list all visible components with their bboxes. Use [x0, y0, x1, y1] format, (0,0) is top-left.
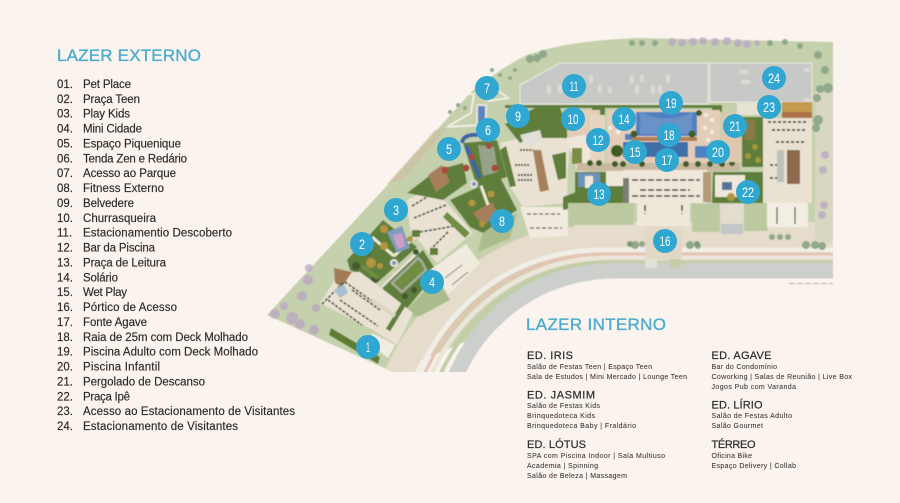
- block: ed. lírio: Salão Gourmet: [712, 423, 763, 430]
- item 18: 18.: [57, 332, 73, 344]
- marker 8: 8: [499, 213, 505, 229]
- item 17: 17.: [57, 317, 73, 329]
- item 20: Piscina Infantil: [83, 362, 160, 374]
- marker 24: [762, 66, 786, 90]
- marker 22: [736, 180, 760, 204]
- block: ed. jasmim: Brinquedoteca Kids: [527, 413, 596, 420]
- site plan map: [267, 37, 834, 372]
- marker 9: 9: [515, 108, 521, 124]
- marker 5: 5: [446, 141, 452, 157]
- reading garden: [568, 171, 768, 234]
- item 20: 20.: [57, 362, 73, 374]
- mini cidade garden: [382, 249, 450, 317]
- item 09: Belvedere: [83, 198, 134, 210]
- block: ed. lírio: Salão de Festas Adulto: [712, 413, 792, 420]
- marker 6: [476, 118, 500, 142]
- item 24: Estacionamento de Visitantes: [83, 421, 238, 433]
- item 07: Acesso ao Parque: [83, 168, 176, 180]
- block: ed. agave: Jogos Pub com Varanda: [712, 384, 796, 391]
- marker 22: 22: [742, 184, 754, 200]
- marker 15: [623, 140, 647, 164]
- marker 3: [384, 198, 408, 222]
- map markers: [350, 66, 786, 359]
- block: ed. iris: ED. IRIS: [527, 350, 573, 362]
- marker 15: 15: [630, 144, 641, 160]
- block: ed. agave: [712, 350, 852, 391]
- block: ed. lótus: Academia | Spinning: [527, 463, 598, 470]
- block: térreo: Oficina Bike: [712, 453, 752, 460]
- item 10: 10.: [57, 213, 73, 225]
- marker 10: 10: [568, 111, 579, 127]
- item 01: 01.: [57, 79, 73, 91]
- block: ed. lírio: [712, 398, 792, 430]
- item 22: 22.: [57, 391, 73, 403]
- marker 10: [561, 107, 585, 131]
- item 02: [57, 94, 140, 106]
- marker 2: 2: [359, 236, 365, 252]
- item 21: 21.: [57, 376, 73, 388]
- pet place: [329, 328, 395, 364]
- item 21: Pergolado de Descanso: [83, 376, 205, 388]
- central building: [615, 170, 711, 268]
- marker 23: 23: [763, 99, 775, 115]
- marker 4: 4: [429, 274, 435, 290]
- praça ipê: [712, 172, 763, 203]
- item 18: Raia de 25m com Deck Molhado: [83, 332, 248, 344]
- pool deck: [607, 110, 720, 163]
- cover the outside of the road curve: [497, 278, 833, 328]
- entrance portico trees: [627, 241, 700, 247]
- block: ed. iris: Salão de Festas Teen | Espaço Teen: [527, 364, 652, 371]
- item 17: Fonte Agave: [83, 317, 147, 329]
- vegetation and flowers: [270, 37, 833, 335]
- block: ed. agave: Coworking | Salas de Reunião | Live Box: [712, 374, 852, 381]
- heading: lazer interno: LAZER INTERNO: [526, 315, 666, 334]
- block: ed. iris: Sala de Estudos | Mini Mercado | Lounge Teen: [527, 374, 687, 381]
- marker 23: [757, 95, 781, 119]
- item 02: 02.: [57, 94, 73, 106]
- marker 7: 7: [484, 80, 490, 96]
- marker 9: [506, 104, 530, 128]
- marker 8: [490, 209, 514, 233]
- item 16: Pórtico de Acesso: [83, 302, 177, 314]
- item 11: Estacionamentio Descoberto: [83, 228, 232, 240]
- churrasqueira and bar: [565, 110, 605, 172]
- marker 20: 20: [712, 144, 724, 160]
- parking lots: [520, 63, 812, 104]
- block: ed. lírio: ED. LÍRIO: [712, 398, 763, 412]
- item 11: 11.: [57, 228, 72, 240]
- marker 13: 13: [594, 186, 605, 202]
- item 09: 09.: [57, 198, 73, 210]
- pools: [608, 110, 714, 158]
- marker 4: [420, 270, 444, 294]
- garden 5 and 6: [386, 127, 507, 200]
- right side strip: [815, 92, 833, 242]
- item 16: 16.: [57, 302, 73, 314]
- item 03: [57, 109, 130, 121]
- item 14: [57, 272, 118, 284]
- pergola garden: [722, 103, 767, 167]
- item 04: Mini Cidade: [83, 124, 142, 136]
- marker 17: 17: [662, 152, 673, 168]
- marker 14: [612, 107, 636, 131]
- item 03: Play Kids: [83, 109, 130, 121]
- heading: lazer externo: LAZER EXTERNO: [57, 46, 201, 65]
- marker 21: [723, 114, 747, 138]
- central left building: [499, 107, 576, 238]
- marker 17: [655, 148, 679, 172]
- item 09: [57, 198, 134, 210]
- item 03: 03.: [57, 109, 73, 121]
- marker 12: [586, 128, 610, 152]
- item 19: Piscina Adulto com Deck Molhado: [83, 347, 258, 359]
- item 15: [57, 287, 127, 299]
- item 04: [57, 124, 142, 136]
- item 05: 05.: [57, 138, 73, 150]
- item 08: Fitness Externo: [83, 183, 164, 195]
- marker 2: [350, 232, 374, 256]
- palm promenade: [576, 160, 740, 172]
- marker 13: [587, 182, 611, 206]
- item 15: Wet Play: [83, 287, 127, 299]
- building 2: [407, 187, 480, 294]
- block: ed. jasmim: Brinquedoteca Baby | Fraldário: [527, 423, 636, 430]
- list: lazer externo: [57, 79, 295, 433]
- block: térreo: Espaço Delivery | Collab: [712, 463, 796, 470]
- park access walkway: [447, 87, 508, 127]
- block: ed. lótus: SPA com Piscina Indoor | Sala Multiuso: [527, 453, 665, 460]
- block: ed. jasmim: Salão de Festas Kids: [527, 403, 600, 410]
- item 14: Solário: [83, 272, 118, 284]
- block: ed. iris: [527, 350, 687, 381]
- marker 7: [475, 76, 499, 100]
- item 12: 12.: [57, 243, 73, 255]
- item 05: Espaço Piquenique: [83, 138, 181, 150]
- block: ed. lótus: Salão de Beleza | Massagem: [527, 473, 627, 480]
- marker 1: [356, 335, 380, 359]
- marker 11: [562, 74, 586, 98]
- item 23: Acesso ao Estacionamento de Visitantes: [83, 406, 295, 418]
- block: térreo: [712, 438, 796, 470]
- marker 18: 18: [664, 127, 675, 143]
- marker 12: 12: [592, 132, 604, 148]
- item 22: [57, 391, 130, 403]
- block: ed. jasmim: [527, 390, 636, 430]
- block: ed. lótus: [527, 438, 665, 480]
- item 07: 07.: [57, 168, 73, 180]
- block: térreo: TÉRREO: [712, 438, 756, 451]
- site ground: [267, 38, 833, 372]
- marker 6: 6: [485, 122, 491, 138]
- marker 14: 14: [618, 111, 630, 127]
- marker 19: 19: [666, 95, 677, 111]
- item 13: 13.: [57, 257, 73, 269]
- left garden: praça teen: [347, 220, 420, 283]
- marker 3: 3: [393, 202, 399, 218]
- item 12: Bar da Piscina: [83, 243, 156, 255]
- item 10: Churrasqueira: [83, 213, 157, 225]
- scale bar: [789, 282, 833, 284]
- item 06: Tenda Zen e Redário: [83, 153, 187, 165]
- marker 16: [653, 229, 677, 253]
- marker 1: 1: [366, 339, 370, 355]
- building 1: [320, 264, 413, 345]
- item 06: 06.: [57, 153, 73, 165]
- garden 8: fitness externo: [450, 177, 517, 252]
- block: ed. jasmim: ED. JASMIM: [527, 390, 595, 402]
- block: ed. lótus: ED. LÓTUS: [527, 438, 586, 451]
- marker 18: [657, 123, 681, 147]
- item 01: [57, 79, 131, 91]
- marker 11: 11: [570, 78, 579, 94]
- right building: [763, 102, 812, 227]
- item 04: 04.: [57, 124, 73, 136]
- item 19: 19.: [57, 347, 73, 359]
- green strip along parking: [504, 104, 722, 116]
- marker 16: 16: [660, 233, 671, 249]
- item 23: 23.: [57, 406, 73, 418]
- item 01: Pet Place: [83, 79, 131, 91]
- item 15: 15.: [57, 287, 73, 299]
- marker 19: [659, 91, 683, 115]
- item 13: Praça de Leitura: [83, 257, 167, 269]
- item 14: 14.: [57, 272, 73, 284]
- item 22: Praça Ipê: [83, 391, 130, 403]
- marker 5: [437, 137, 461, 161]
- marker 24: 24: [768, 70, 780, 86]
- marker 21: 21: [730, 118, 741, 134]
- block: ed. agave: Bar do Condomínio: [712, 364, 777, 371]
- marker 20: [706, 140, 730, 164]
- item 08: 08.: [57, 183, 73, 195]
- item 02: Praça Teen: [83, 94, 140, 106]
- block: ed. agave: ED. AGAVE: [712, 350, 772, 362]
- item 24: 24.: [57, 421, 73, 433]
- access road bands: [398, 236, 833, 375]
